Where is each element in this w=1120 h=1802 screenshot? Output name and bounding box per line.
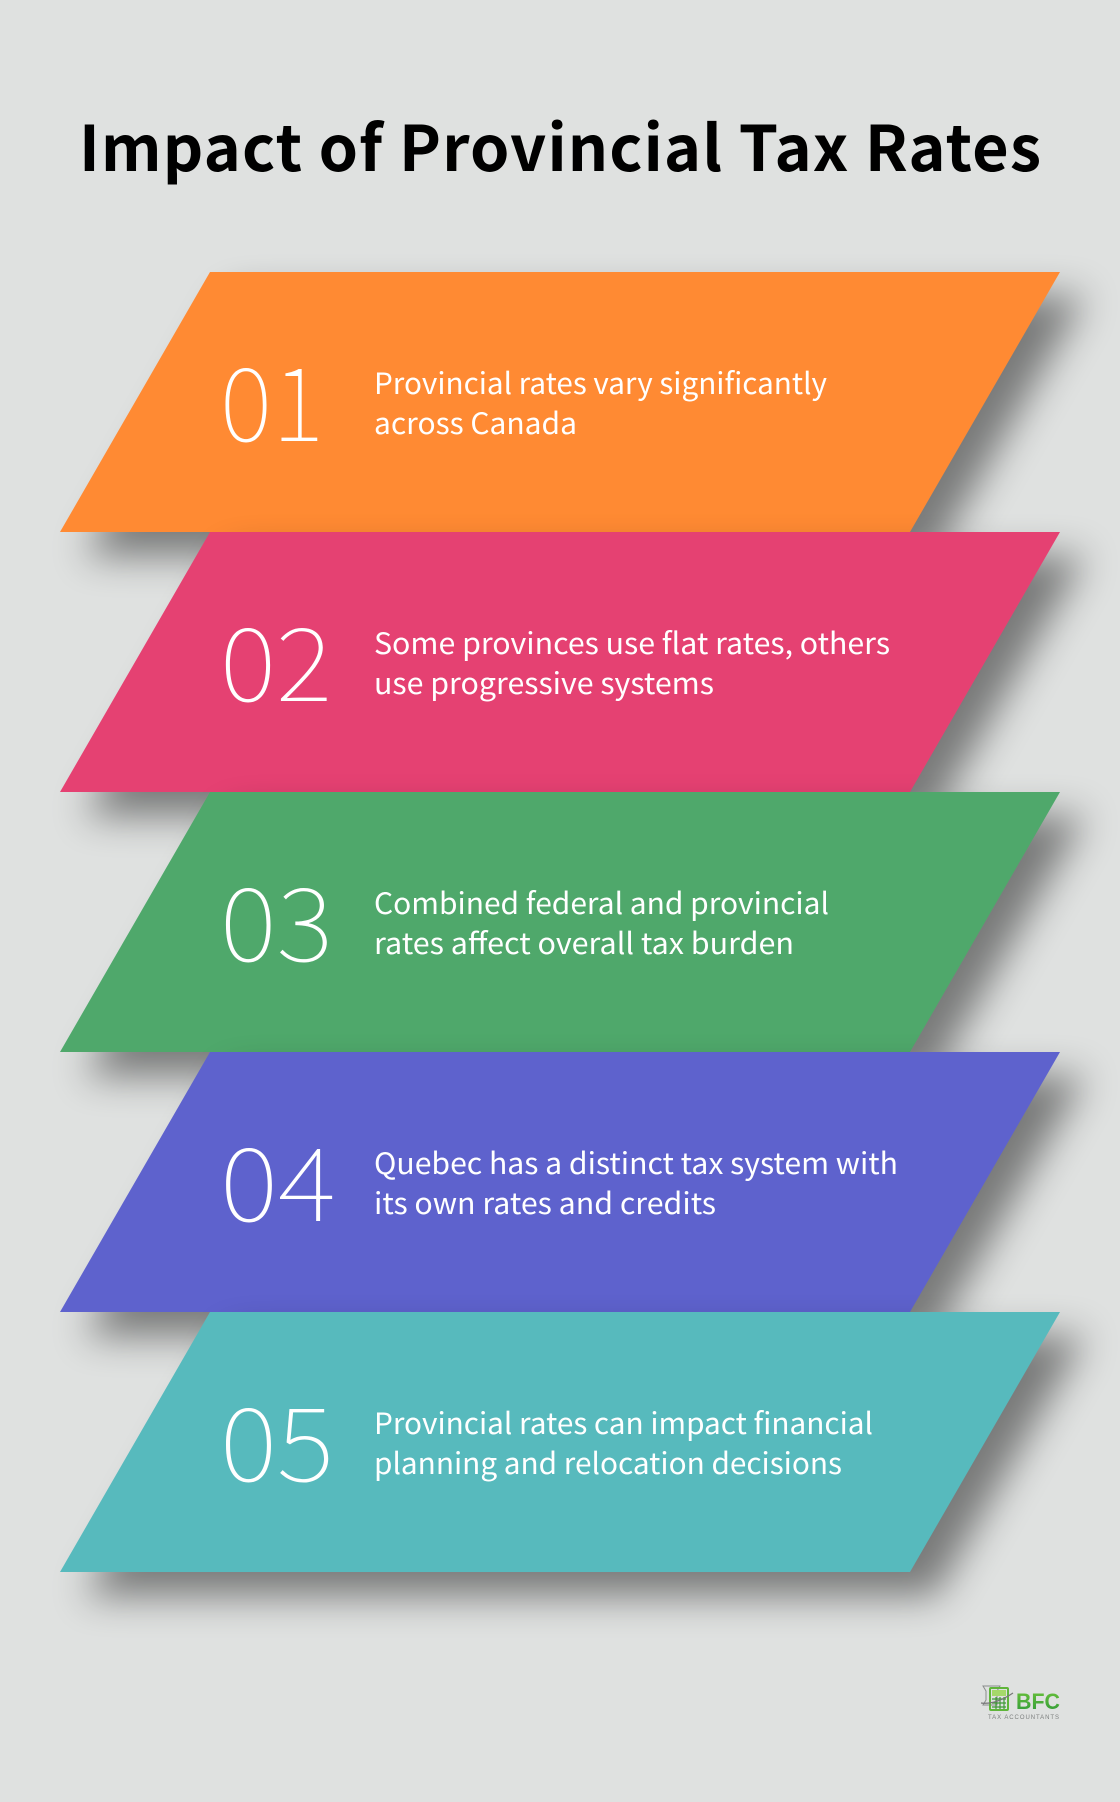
number 04: 04	[220, 1104, 336, 1251]
title: Impact of Provincial Tax Rates	[79, 99, 1041, 190]
text: step 05: planning and relocation decisions	[374, 1441, 842, 1483]
text: step 02	[374, 621, 890, 703]
text: step 01: across Canada	[374, 401, 577, 443]
teal parallelogram	[60, 1312, 1060, 1572]
panel: step 02	[60, 532, 1060, 792]
number 02: 02	[220, 584, 332, 731]
indigo parallelogram	[60, 1052, 1060, 1312]
pink parallelogram	[60, 532, 1060, 792]
logo wordmark: BFC	[1016, 1689, 1060, 1714]
panel: step 04	[60, 1052, 1060, 1312]
number 01: 01	[220, 324, 324, 471]
panel: step 05	[60, 1312, 1060, 1572]
panel: step 03	[60, 792, 1060, 1052]
text: step 04: Quebec has a distinct tax system with	[374, 1141, 898, 1183]
text: step 01: Provincial rates vary significantly	[374, 361, 827, 403]
text: step 05	[374, 1401, 873, 1483]
icon: calculator	[981, 1686, 1013, 1710]
text: step 04	[374, 1141, 898, 1223]
number 05: 05	[220, 1364, 334, 1511]
text: step 04: its own rates and credits	[374, 1181, 716, 1223]
text: step 01	[374, 361, 827, 443]
logo tagline: TAX ACCOUNTANTS	[988, 1715, 1059, 1721]
text: step 02: use progressive systems	[374, 661, 714, 703]
text: step 05: Provincial rates can impact financial	[374, 1401, 873, 1443]
text: step 03: rates affect overall tax burden	[374, 921, 794, 963]
logo: BFC Tax Accountants	[981, 1686, 1060, 1721]
number 03: 03	[220, 844, 333, 991]
orange parallelogram	[60, 272, 1060, 532]
panel: step 01	[60, 272, 1060, 532]
text: step 03: Combined federal and provincial	[374, 881, 829, 923]
text: step 03	[374, 881, 829, 963]
text: step 02: Some provinces use flat rates, others	[374, 621, 890, 663]
green parallelogram	[60, 792, 1060, 1052]
